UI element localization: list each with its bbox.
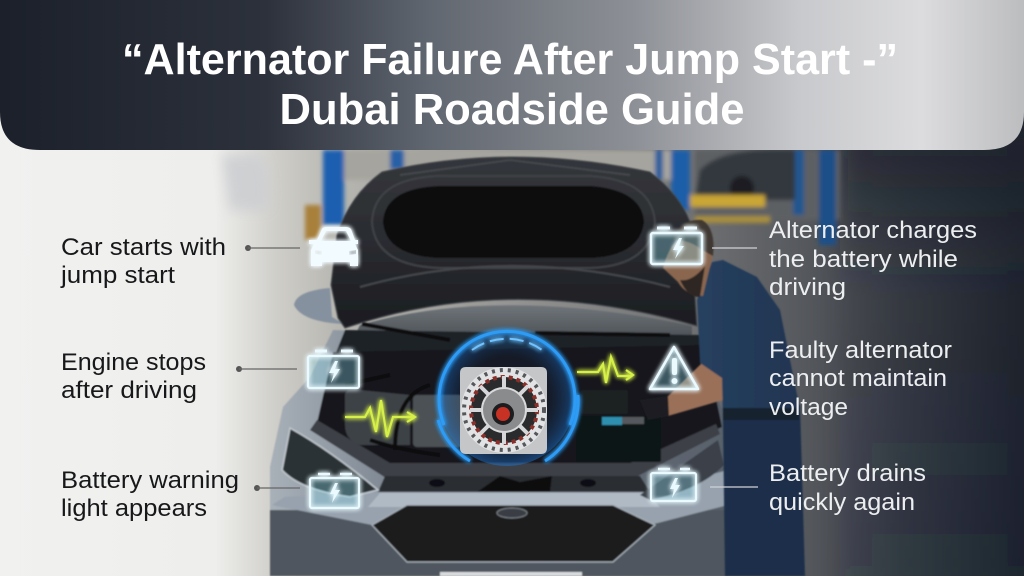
head — [663, 230, 712, 296]
engine parts — [345, 390, 410, 445]
header banner — [0, 0, 1024, 150]
right label 3: Battery drains — [769, 460, 926, 487]
icon: battery top right — [651, 228, 702, 264]
right label 2 — [769, 337, 952, 421]
pulse arrow: right — [577, 357, 633, 383]
right label 1: driving — [769, 274, 846, 301]
left label 3 — [61, 467, 300, 522]
engine bay — [317, 345, 722, 467]
left label 1: jump start — [60, 262, 175, 289]
left label 3: Battery warning — [61, 467, 239, 494]
glowing ring — [438, 331, 578, 461]
car body and bumper — [270, 330, 728, 576]
mechanic — [640, 220, 805, 576]
pants — [723, 405, 805, 576]
arm — [666, 363, 723, 416]
left label 1: Car starts with — [61, 234, 226, 261]
icon: warning triangle — [650, 347, 698, 389]
icon: car — [309, 227, 358, 266]
title: Dubai Roadside Guide — [280, 85, 744, 134]
right label 1: Alternator charges — [769, 217, 977, 244]
right label 2: cannot maintain — [769, 365, 947, 392]
right label 3: quickly again — [769, 489, 915, 516]
right label 1 — [712, 217, 977, 301]
left label 1 — [60, 234, 300, 289]
left label 3: light appears — [61, 495, 207, 522]
right label 2: voltage — [769, 394, 848, 421]
windshield — [350, 305, 692, 345]
photo: car with open hood — [270, 157, 728, 576]
title: “Alternator Failure After Jump Start -” — [122, 35, 898, 84]
hood inner opening — [383, 186, 644, 258]
alternator — [460, 367, 547, 454]
icon: battery lower right — [651, 469, 696, 501]
right label 2: Faulty alternator — [769, 337, 952, 364]
headlights — [282, 428, 378, 497]
centre: alternator with glowing ring — [438, 330, 578, 466]
pulse arrow: left — [345, 400, 415, 437]
left label 2: Engine stops — [61, 349, 206, 376]
left label 2: after driving — [61, 377, 197, 404]
icon: battery left — [308, 351, 359, 388]
glove — [640, 396, 669, 420]
title — [122, 35, 898, 134]
shirt — [697, 260, 800, 420]
left label 2 — [61, 349, 297, 404]
hood — [331, 157, 697, 328]
right label 3 — [710, 460, 926, 516]
licence plate — [440, 572, 582, 576]
grille — [372, 505, 655, 562]
cowl and wipers — [335, 330, 705, 355]
right label 1: the battery while — [769, 246, 958, 273]
side mirror — [294, 288, 344, 324]
icon: battery lower left — [310, 474, 359, 508]
